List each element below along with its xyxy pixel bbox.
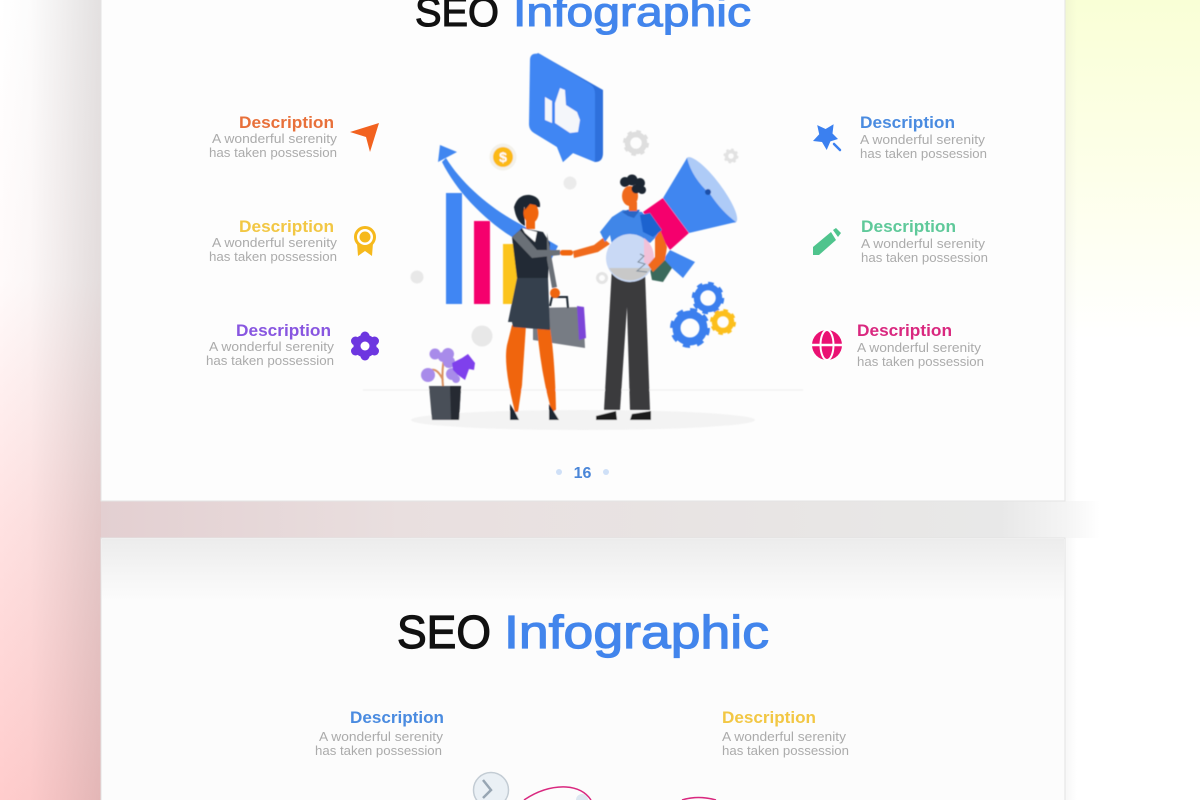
item: blue description: Description [860, 113, 955, 132]
item: bottom-right yellow description [722, 708, 849, 758]
item: orange description [209, 113, 338, 160]
item: bottom-left blue description [315, 708, 444, 758]
item: blue description: has taken possession [860, 146, 987, 161]
dollar coin [490, 144, 516, 170]
item: green description: has taken possession [861, 250, 988, 265]
item: green description: A wonderful serenity [861, 236, 986, 251]
icon: pencil [813, 228, 841, 255]
item: bottom-left blue description: A wonderful serenity [319, 729, 444, 744]
title: bottom slide: Infographic [504, 606, 769, 658]
gray gears and coins [410, 132, 738, 346]
item: purple description: has taken possession [206, 353, 334, 368]
item: pink description [857, 321, 984, 369]
right column descriptions [812, 113, 988, 369]
icon: flower gear [351, 332, 379, 360]
growth arrow [438, 145, 558, 260]
icon: magic star [813, 124, 840, 150]
pink curves [524, 787, 716, 800]
page number [556, 465, 609, 482]
item: bottom-right yellow description: has taken possession [722, 743, 849, 758]
item: blue description: A wonderful serenity [860, 132, 986, 147]
curly hair [620, 174, 646, 194]
item: pink description: has taken possession [857, 354, 984, 369]
item: yellow description: A wonderful serenity [212, 235, 338, 250]
left column descriptions [206, 113, 379, 368]
item: blue description [860, 113, 987, 161]
megaphone [643, 152, 744, 282]
item: pink description: Description [857, 321, 952, 340]
icon: award ribbon [356, 228, 374, 256]
item: yellow description: has taken possession [209, 249, 337, 264]
item: bottom-right yellow description: Description [722, 708, 816, 727]
panel: bottom slide [101, 538, 1065, 800]
dollar coin: $ [499, 149, 507, 165]
ground [363, 390, 803, 430]
central illustration [363, 53, 803, 430]
clock [474, 772, 508, 800]
item: purple description: Description [236, 321, 331, 340]
icon: paper plane [350, 123, 379, 152]
item: orange description: has taken possession [209, 145, 337, 160]
colored gears [672, 284, 734, 346]
item: purple description [206, 321, 335, 368]
briefcase [533, 297, 586, 348]
item: bottom-left blue description: Description [350, 708, 444, 727]
bar chart [446, 193, 518, 304]
man [573, 174, 667, 420]
item: green description [861, 217, 988, 265]
item: yellow description: Description [239, 217, 334, 236]
item: bottom-left blue description: has taken possession [315, 743, 442, 758]
potted plant [421, 348, 475, 420]
item: pink description: A wonderful serenity [857, 340, 982, 355]
panel: top slide [101, 0, 1065, 501]
page number: 16 [574, 465, 592, 482]
item: bottom-right yellow description: A wonderful serenity [722, 729, 847, 744]
icon: thumbs-up bubble [529, 53, 603, 162]
item: green description: Description [861, 217, 956, 236]
item: yellow description [209, 217, 338, 264]
item: purple description: A wonderful serenity [209, 339, 335, 354]
item: orange description: A wonderful serenity [212, 131, 338, 146]
item: orange description: Description [239, 113, 334, 132]
woman [506, 195, 586, 420]
icon: globe [812, 330, 842, 360]
title: bottom slide: SEO [397, 606, 491, 658]
bottom illustration fragment [474, 772, 716, 800]
